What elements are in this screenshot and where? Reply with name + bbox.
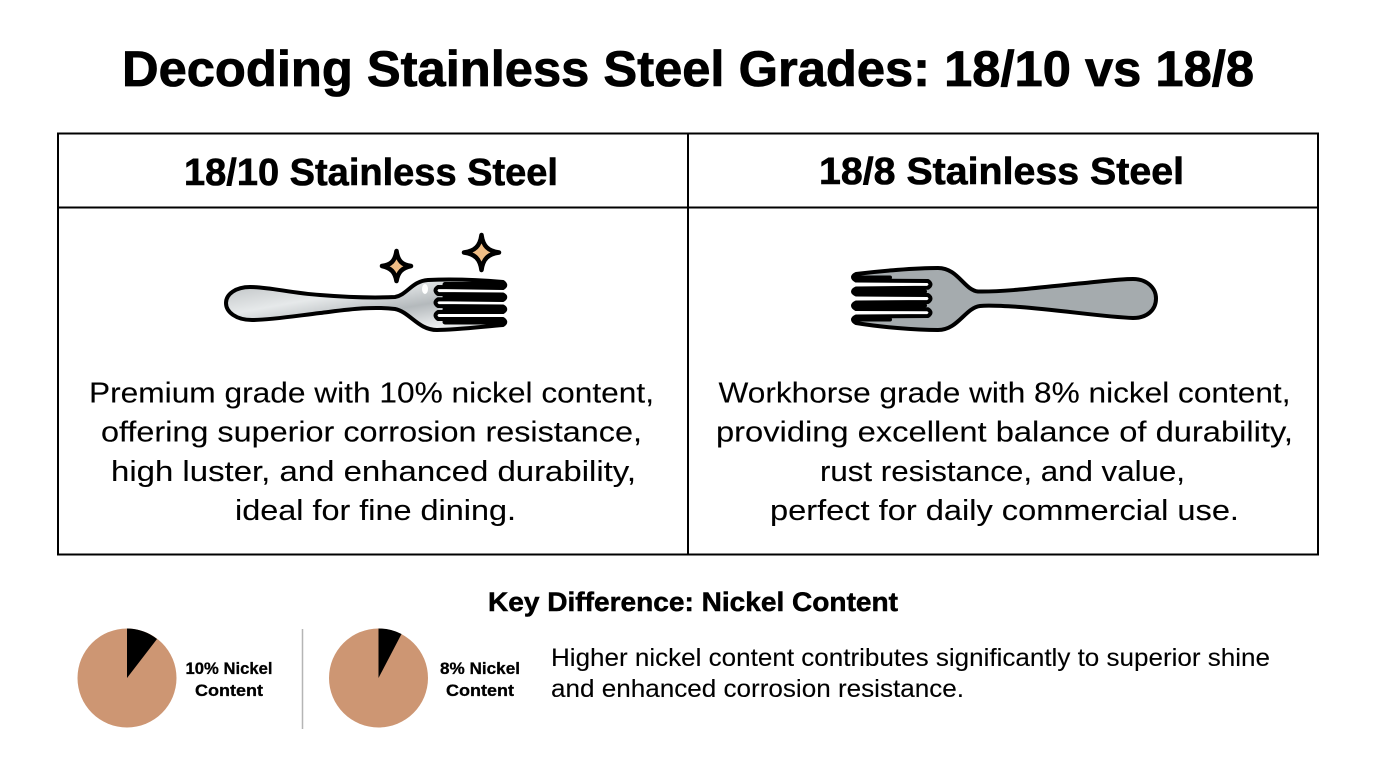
description: 18/8: rust resistance, and value, (820, 456, 1185, 488)
description: 18/8: Workhorse grade with 8% nickel content, (718, 378, 1290, 410)
label: 10% nickel content: Content (195, 681, 263, 700)
heading: 18/10: 18/10 Stainless Steel (184, 152, 558, 194)
label: 8% nickel content: Content (446, 681, 514, 700)
comparison table (58, 133, 1318, 554)
subheading: Key Difference: Nickel Content (488, 587, 898, 617)
title: Decoding Stainless Steel Grades: 18/10 vs 18/8 (122, 41, 1254, 97)
icon: standard fork (853, 268, 1156, 330)
icon: shiny fork (226, 235, 505, 330)
callout text: Higher nickel content contributes significantly to superior shine (551, 644, 1270, 672)
description: 18/8 (716, 378, 1293, 527)
heading: 18/8: 18/8 Stainless Steel (819, 151, 1184, 193)
description: 18/10: Premium grade with 10% nickel content, (89, 378, 654, 410)
description: 18/10: ideal for fine dining. (235, 495, 516, 527)
label: 8% nickel content (440, 659, 520, 700)
label: 10% nickel content: 10% Nickel (186, 659, 272, 678)
label: 8% nickel content: 8% Nickel (440, 659, 520, 678)
section: key difference (78, 587, 1270, 729)
pie chart: 8% nickel (329, 628, 428, 728)
callout text (551, 644, 1270, 703)
description: 18/8: perfect for daily commercial use. (770, 495, 1239, 527)
label: 10% nickel content (186, 659, 272, 700)
pie chart: 10% nickel (78, 628, 176, 728)
description: 18/8: providing excellent balance of durability, (716, 416, 1293, 448)
panel: 18/8 stainless steel (716, 151, 1293, 527)
callout text: and enhanced corrosion resistance. (551, 675, 964, 703)
description: 18/10 (89, 378, 654, 527)
icon: large sparkle (464, 235, 499, 270)
icon: small sparkle (382, 251, 411, 281)
description: 18/10: high luster, and enhanced durability, (111, 456, 636, 488)
description: 18/10: offering superior corrosion resistance, (101, 416, 642, 448)
panel: 18/10 stainless steel (89, 152, 654, 527)
